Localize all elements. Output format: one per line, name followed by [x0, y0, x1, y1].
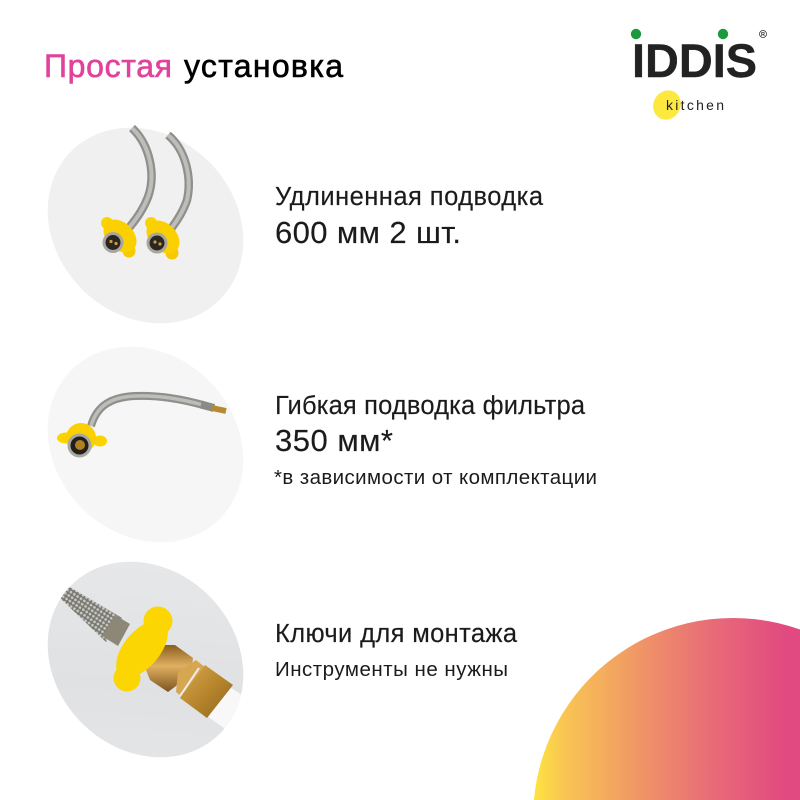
photo 2: flexible hose	[8, 307, 283, 582]
photo 3: fitting close-up	[48, 562, 244, 758]
braided hose	[59, 583, 130, 646]
item 2 text	[274, 392, 597, 489]
yellow nut right	[140, 214, 186, 260]
logo wordmark: IDDIS	[632, 34, 757, 87]
item 3 text	[275, 620, 518, 681]
logo green dots	[631, 29, 728, 39]
hoses	[127, 128, 189, 230]
yellow wing nut	[114, 606, 172, 692]
item 2 text: 350 мм*	[275, 423, 393, 458]
item 2 text: *в зависимости от комплектации	[274, 466, 597, 489]
hose	[91, 396, 226, 426]
item 3 text: Инструменты не нужны	[275, 658, 508, 681]
item 1 text: Удлиненная подводка	[275, 183, 544, 211]
title: установка	[184, 48, 343, 84]
logo kitchen: kitchen	[666, 97, 724, 113]
gradient corner circle	[534, 618, 800, 800]
logo: IDDIS kitchen	[631, 29, 766, 125]
yellow nut	[57, 423, 107, 458]
item 1 text: 600 мм 2 шт.	[275, 215, 461, 250]
item 2 text: Гибкая подводка фильтра	[275, 392, 586, 420]
yellow nut left	[97, 213, 143, 259]
photo 1: two hoses	[8, 88, 283, 363]
title	[44, 48, 343, 84]
logo yellow spot	[648, 85, 686, 125]
white pipe	[208, 688, 241, 728]
item 1 text	[275, 183, 544, 250]
logo registered mark: R	[761, 32, 765, 38]
title: Простая	[44, 48, 172, 84]
brass fittings	[146, 645, 233, 718]
item 3 text: Ключи для монтажа	[275, 620, 518, 648]
